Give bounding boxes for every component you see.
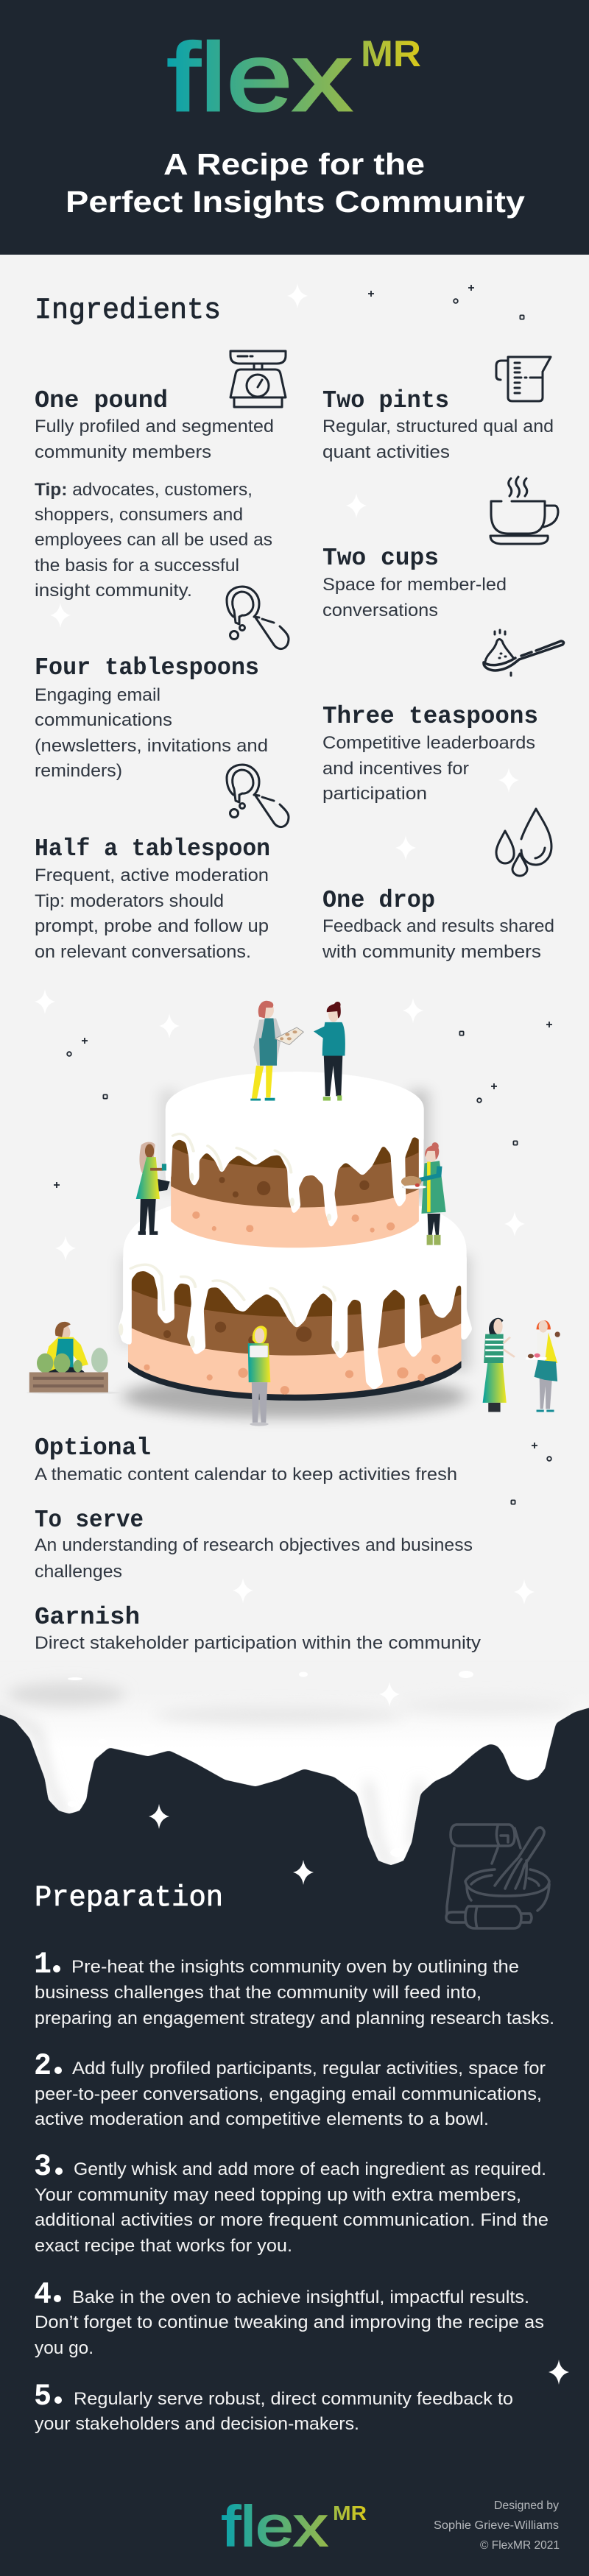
title: A Recipe for the [163, 147, 425, 181]
step 2: peer-to-peer conversations, engaging email communications, [35, 2084, 542, 2104]
tip text [35, 480, 272, 601]
ingredient: three teaspoons: participation [322, 784, 427, 804]
ingredient: garnish [35, 1604, 481, 1653]
ingredient: one pound: Fully profiled and segmented [35, 417, 274, 436]
credits: © FlexMR 2021 [480, 2539, 560, 2552]
heading: Ingredients: Ingredients [35, 294, 221, 328]
people: two women with cakes [483, 1318, 560, 1412]
person: woman with cup and bag [136, 1142, 170, 1235]
icon: kitchen scale [230, 351, 286, 407]
decorative sparkles and marks: ingredients [50, 283, 524, 860]
step 3: Gently whisk and add more of each ingredient as required. [74, 2159, 546, 2179]
icon: cup of tea [490, 477, 558, 544]
illustration: dripping milk [0, 1660, 589, 1869]
ingredient: two cups [322, 545, 507, 620]
step 2: 2 [34, 2048, 52, 2084]
panel: preparation background [0, 1693, 589, 2576]
ingredient: two pints [322, 387, 554, 462]
step 3: additional activities or more frequent communication. Find the [35, 2210, 549, 2230]
credits [434, 2499, 560, 2552]
person: baker with tray [250, 1001, 303, 1100]
ingredient: half a tablespoon: on relevant conversations. [35, 942, 251, 962]
ingredient: three teaspoons: Three teaspoons [322, 703, 538, 730]
ingredient: to serve: To serve [35, 1507, 144, 1534]
cake shadows [122, 1090, 468, 1418]
ingredient: two cups: Two cups [322, 545, 439, 572]
title [66, 147, 525, 219]
step 4: Bake in the oven to achieve insightful, impactful results. [72, 2287, 529, 2307]
panel: header [0, 0, 589, 255]
ingredient: garnish: Garnish [35, 1604, 140, 1631]
panel: ingredients right column [322, 357, 564, 962]
ingredient: one drop: with community members [322, 942, 541, 962]
ingredient: four tablespoons: reminders) [35, 761, 122, 781]
logo: footer FlexMR: flex [222, 2495, 328, 2558]
tip text: employees can all be used as [35, 530, 272, 550]
logo: FlexMR: flex [167, 23, 352, 131]
step 1: business challenges that the community will feed into, [35, 1983, 482, 2003]
ingredient: four tablespoons: (newsletters, invitations and [35, 736, 268, 756]
ingredient: four tablespoons: communications [35, 710, 172, 730]
step 4: you go. [35, 2338, 94, 2358]
ingredient: two cups: Space for member-led [322, 575, 507, 595]
step 5 [34, 2379, 513, 2434]
step 4: 4 [34, 2277, 52, 2313]
icon: tablespoon [227, 587, 289, 649]
step 4 [34, 2277, 544, 2358]
sparkles above milk [233, 1578, 535, 1604]
heading: Preparation: Preparation [35, 1882, 223, 1915]
step 5: your stakeholders and decision-makers. [35, 2414, 359, 2434]
step 4: Don’t forget to continue tweaking and improving the recipe as [35, 2313, 544, 2332]
icon: teaspoon with powder [484, 630, 564, 676]
ingredient: four tablespoons [35, 654, 268, 781]
ingredient: to serve [35, 1507, 473, 1582]
illustration: tiered cake with people [27, 1001, 560, 1426]
ingredient: half a tablespoon: prompt, probe and follow up [35, 916, 269, 936]
ingredient: to serve: challenges [35, 1562, 122, 1582]
ingredient: half a tablespoon: Tip: moderators should [35, 891, 224, 911]
person: woman with laptop [248, 1326, 270, 1426]
ingredient: half a tablespoon: Half a tablespoon [35, 835, 270, 863]
ingredient: two pints: Two pints [322, 387, 449, 414]
ingredient: one drop [322, 887, 554, 962]
logo: footer FlexMR: MR [333, 2502, 367, 2524]
ingredient: one pound: One pound [35, 387, 168, 414]
credits: Sophie Grieve-Williams [434, 2519, 559, 2532]
step 5: Regularly serve robust, direct community feedback to [74, 2389, 513, 2409]
step 2: Add fully profiled participants, regular activities, space for [72, 2059, 546, 2078]
person: gardener with planter [27, 1322, 124, 1394]
panel: ingredients left column [35, 351, 289, 962]
ingredient: four tablespoons: Engaging email [35, 685, 161, 705]
ingredient: two pints: quant activities [322, 442, 450, 462]
ingredient: three teaspoons: Competitive leaderboards [322, 733, 535, 753]
ingredient: three teaspoons: and incentives for [322, 759, 469, 779]
upper cake tier [166, 1072, 424, 1248]
step 1: Pre-heat the insights community oven by outlining the [71, 1957, 519, 1977]
credits: Designed by [494, 2499, 559, 2512]
step 3: exact recipe that works for you. [35, 2236, 292, 2256]
tip text: Tip: advocates, customers, [35, 480, 253, 500]
ingredient: two cups: conversations [322, 601, 438, 620]
ingredient: four tablespoons: Four tablespoons [35, 654, 259, 682]
step 1: preparing an engagement strategy and planning research tasks. [35, 2009, 554, 2028]
person: woman with roast turkey [401, 1142, 446, 1245]
tip text: the basis for a successful [35, 556, 239, 576]
ingredient: half a tablespoon: Frequent, active moderation [35, 866, 269, 885]
title: Perfect Insights Community [66, 185, 525, 219]
step 2 [34, 2048, 546, 2129]
logo: FlexMR: MR [361, 33, 421, 74]
ingredient: one pound: community members [35, 442, 211, 462]
logo: FlexMR [167, 23, 421, 131]
step 5: 5 [34, 2379, 52, 2414]
ingredient: one drop: One drop [322, 887, 435, 914]
ingredient: half a tablespoon [35, 835, 270, 962]
step 3: 3 [34, 2149, 52, 2184]
ingredient: three teaspoons [322, 703, 538, 804]
ingredient: one drop: Feedback and results shared [322, 916, 554, 936]
tip text: shoppers, consumers and [35, 505, 243, 525]
step 3: Your community may need topping up with extra members, [35, 2185, 521, 2205]
ingredient: to serve: An understanding of research objectives and business [35, 1535, 473, 1555]
icon: measuring jug [496, 357, 551, 401]
person: woman in teal sweater [314, 1002, 345, 1100]
ingredient: two pints: Regular, structured qual and [322, 417, 554, 436]
step 2: active moderation and competitive elements to a bowl. [35, 2109, 489, 2129]
logo: footer FlexMR [222, 2495, 367, 2558]
decorative sparkles and marks: cake [35, 989, 552, 1504]
sparkles: preparation [149, 1682, 569, 2385]
ingredient: one pound [35, 387, 274, 462]
lower cake tier [119, 1204, 472, 1401]
icon: drops [496, 809, 551, 876]
tip text: insight community. [35, 581, 192, 601]
ingredient: optional: A thematic content calendar to keep activities fresh [35, 1465, 457, 1485]
ingredient: garnish: Direct stakeholder participation within the community [35, 1633, 481, 1653]
ingredient: optional: Optional [35, 1434, 151, 1462]
icon: half tablespoon [227, 765, 289, 827]
step 3 [34, 2149, 549, 2256]
step 1 [34, 1947, 554, 2028]
ingredient: optional [35, 1434, 457, 1485]
icon: recipe scroll, whisk, bowl and rolling pin [446, 1825, 549, 1928]
step 1: 1 [34, 1947, 52, 1982]
